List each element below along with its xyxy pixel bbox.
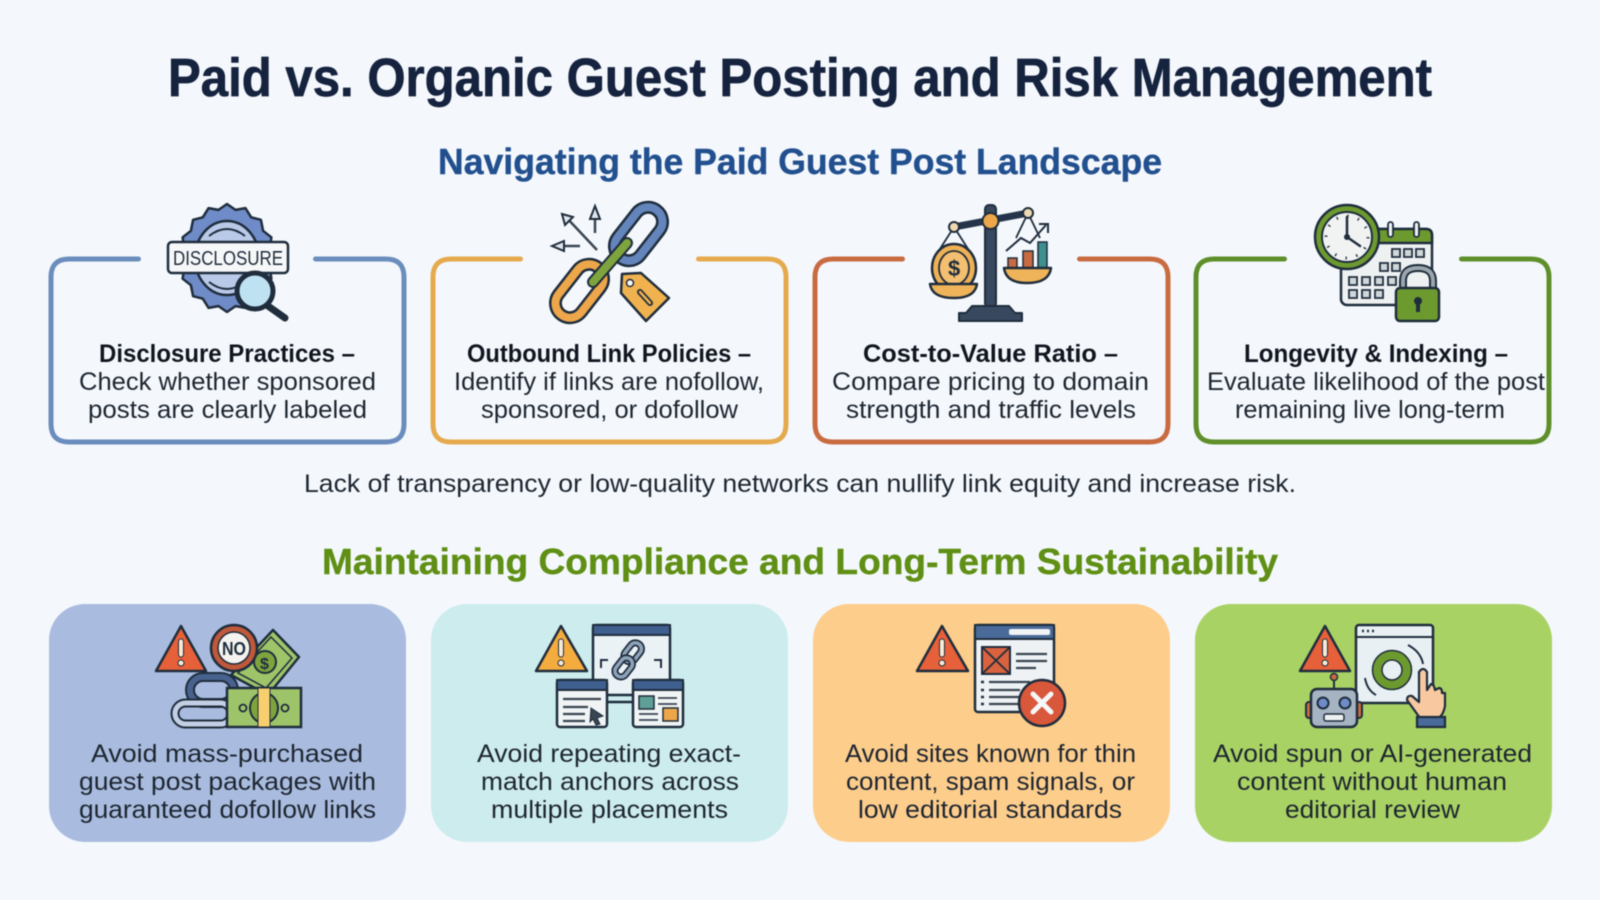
icon: balance scale with coin and bars	[930, 205, 1051, 321]
panel: avoid mass-purchased packages	[49, 604, 406, 842]
text: avoid spun or AI content: editorial review	[1285, 796, 1461, 824]
text: avoid repeating exact-match anchors: Avoid repeating exact-	[477, 740, 741, 768]
icon: warning and linked browser windows	[536, 625, 683, 727]
icon: disclosure badge with magnifier	[168, 204, 288, 318]
text: disclosure practices	[79, 340, 376, 424]
panel: disclosure practices	[51, 204, 404, 442]
text: cost-to-value ratio: Cost-to-Value Ratio –	[863, 340, 1118, 368]
text: disclosure practices: Disclosure Practices –	[99, 340, 355, 368]
panel: avoid spun or AI content	[1195, 604, 1552, 842]
title: Paid vs. Organic Guest Posting and Risk Management	[168, 48, 1432, 108]
panel: longevity and indexing	[1196, 205, 1549, 442]
text: avoid mass-purchased packages: Avoid mass-purchased	[91, 740, 363, 768]
panel border	[51, 259, 404, 442]
text: avoid mass-purchased packages: guaranteed dofollow links	[79, 796, 376, 824]
text: avoid thin content sites: low editorial standards	[858, 796, 1122, 824]
text: longevity and indexing: Evaluate likelihood of the post	[1207, 368, 1545, 396]
text: longevity and indexing: remaining live long-term	[1235, 396, 1505, 424]
text: disclosure practices: posts are clearly labeled	[88, 396, 367, 424]
panel background	[431, 604, 788, 842]
icon: warning, no sign, cash and chains	[156, 625, 301, 727]
panel: avoid repeating exact-match anchors	[431, 604, 788, 842]
text: outbound link policies: sponsored, or dofollow	[481, 396, 739, 424]
icon: clock, calendar and padlock	[1315, 205, 1439, 321]
heading: compliance section: Maintaining Compliance and Long-Term Sustainability	[322, 541, 1278, 582]
text: avoid thin content sites	[845, 740, 1136, 824]
panel: cost-to-value ratio	[815, 205, 1168, 442]
text: avoid mass-purchased packages: guest post packages with	[79, 768, 376, 796]
panel border	[433, 259, 786, 442]
icon: warning and rejected web page	[917, 625, 1065, 726]
panel background	[49, 604, 406, 842]
text: longevity and indexing: Longevity & Indexing –	[1244, 340, 1508, 368]
icon: disclosure badge with magnifier: DISCLOSURE	[173, 248, 283, 270]
panel: avoid thin content sites	[813, 604, 1170, 842]
heading: navigating section: Navigating the Paid Guest Post Landscape	[438, 141, 1162, 182]
text: avoid thin content sites: Avoid sites known for thin	[845, 740, 1136, 768]
text: outbound link policies: Identify if links are nofollow,	[454, 368, 764, 396]
text: avoid thin content sites: content, spam signals, or	[846, 768, 1135, 796]
panel border	[1196, 259, 1549, 442]
icon: warning, no sign, cash and chains: $	[260, 656, 269, 673]
icon: warning, robot and human hand on review screen	[1300, 625, 1445, 727]
text: outbound link policies	[454, 340, 764, 424]
panel background	[813, 604, 1170, 842]
text: avoid spun or AI content: Avoid spun or AI-generated	[1213, 740, 1532, 768]
panel border	[815, 259, 1168, 442]
text: avoid spun or AI content: content without human	[1237, 768, 1507, 796]
text: avoid repeating exact-match anchors: match anchors across	[481, 768, 739, 796]
text: longevity and indexing	[1207, 340, 1545, 424]
icon: balance scale with coin and bars: $	[948, 256, 960, 281]
text: avoid repeating exact-match anchors: multiple placements	[491, 796, 728, 824]
text: avoid spun or AI content	[1213, 740, 1532, 824]
panel: outbound link policies	[433, 201, 786, 442]
icon: warning, no sign, cash and chains: NO	[222, 639, 246, 659]
text: outbound link policies: Outbound Link Policies –	[467, 340, 751, 368]
text: disclosure practices: Check whether sponsored	[79, 368, 376, 396]
icon: chain links with arrows and tag	[550, 201, 669, 324]
note: transparency warning: Lack of transparency or low-quality networks can nullify link equity and increase risk.	[304, 470, 1296, 498]
panel background	[1195, 604, 1552, 842]
text: avoid repeating exact-match anchors	[477, 740, 741, 824]
text: cost-to-value ratio	[832, 340, 1149, 424]
text: cost-to-value ratio: strength and traffic levels	[846, 396, 1136, 424]
text: cost-to-value ratio: Compare pricing to domain	[832, 368, 1149, 396]
text: avoid mass-purchased packages	[79, 740, 376, 824]
